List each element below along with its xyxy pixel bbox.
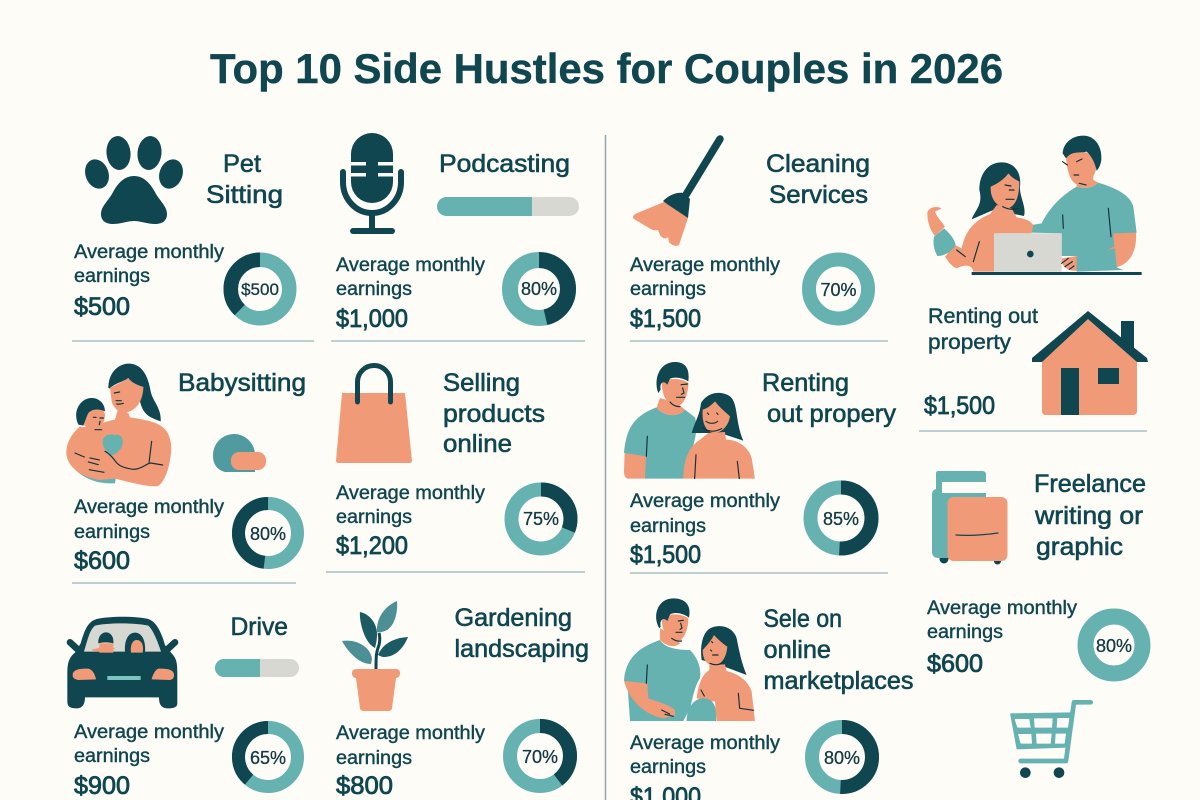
heading	[1034, 470, 1146, 561]
panel: pet sitting	[74, 135, 301, 330]
heading: out propery	[767, 400, 897, 428]
panel: babysitting	[66, 364, 306, 575]
donut chart: 75%	[523, 509, 559, 529]
heading: Drive	[230, 613, 288, 641]
icon: car	[67, 617, 177, 708]
earnings text: $1,200	[336, 532, 408, 560]
illustration: couple	[624, 598, 755, 721]
earnings text: earnings	[74, 266, 150, 287]
donut chart	[512, 490, 570, 548]
earnings text: $1,500	[630, 305, 701, 333]
donut chart: 85%	[823, 509, 859, 529]
donut chart: $500	[241, 280, 279, 299]
panel: gardening landscaping	[336, 601, 589, 800]
earnings text: Average monthly	[74, 722, 225, 743]
heading: Freelance	[1034, 470, 1146, 498]
illustration: couple	[624, 362, 755, 479]
center vertical divider	[604, 135, 606, 800]
donut chart	[226, 715, 310, 799]
title: Top 10 Side Hustles for Couples in 2026	[210, 45, 1003, 92]
earnings text: earnings	[927, 622, 1003, 643]
icon: shopping cart	[1010, 702, 1091, 778]
heading: Sele on	[764, 605, 842, 633]
heading: graphic	[1036, 533, 1123, 561]
heading	[206, 150, 283, 209]
earnings text: $1,000	[336, 305, 408, 333]
earnings text: $500	[74, 293, 130, 321]
earnings text: earnings	[630, 516, 706, 537]
earnings text	[630, 255, 781, 333]
donut chart	[1086, 616, 1142, 674]
donut chart: 80%	[824, 748, 860, 768]
heading: online	[443, 430, 512, 458]
donut chart	[810, 488, 872, 548]
heading: Services	[769, 181, 868, 209]
earnings text: Average monthly	[630, 491, 781, 512]
icon: house	[1032, 311, 1148, 415]
heading: Selling	[443, 369, 520, 397]
heading: products	[443, 400, 545, 428]
small heading: Renting out	[928, 305, 1038, 328]
earnings text: Average monthly	[927, 598, 1078, 619]
donut chart: 70%	[522, 747, 558, 767]
earnings text: Average monthly	[336, 255, 486, 276]
heading	[454, 604, 589, 663]
earnings text: earnings	[336, 507, 412, 528]
donut chart	[510, 260, 568, 318]
panel: cleaning services	[630, 139, 870, 333]
donut chart: 70%	[820, 280, 857, 300]
small heading	[928, 305, 1038, 354]
earnings text: Average monthly	[630, 733, 781, 754]
donut chart: 65%	[250, 748, 286, 768]
earnings text	[74, 722, 225, 800]
earnings text	[336, 255, 486, 333]
icon: microphone	[343, 133, 401, 231]
heading: writing or	[1034, 502, 1143, 530]
heading	[443, 369, 545, 458]
earnings text: Average monthly	[336, 483, 486, 504]
heading: Renting	[762, 369, 849, 397]
earnings text: $800	[336, 772, 393, 800]
donut chart	[510, 726, 570, 786]
earnings text	[630, 733, 781, 800]
earnings text: earnings	[336, 748, 412, 769]
icon: paw	[81, 135, 187, 224]
earnings text: $600	[927, 650, 983, 678]
donut chart	[219, 248, 301, 330]
earnings text: Average monthly	[630, 255, 781, 276]
donut chart	[812, 727, 872, 787]
donut chart	[809, 260, 868, 318]
heading	[762, 369, 897, 428]
progress bar	[215, 659, 299, 677]
donut chart: 80%	[521, 279, 557, 299]
illustration: couple at laptop	[927, 136, 1142, 275]
heading: Podcasting	[439, 150, 570, 178]
donut chart	[235, 500, 301, 566]
earnings text: earnings	[74, 522, 150, 543]
earnings text: Average monthly	[336, 723, 486, 744]
earnings text: $900	[74, 772, 130, 800]
earnings text: earnings	[630, 279, 706, 300]
earnings text: earnings	[630, 757, 706, 778]
earnings text	[927, 598, 1078, 678]
panel: podcasting	[336, 133, 579, 333]
small heading: property	[928, 331, 1012, 354]
heading: online	[764, 636, 831, 664]
earnings text	[630, 491, 781, 569]
heading	[764, 605, 914, 695]
donut chart: 80%	[250, 524, 286, 544]
earnings text: $600	[74, 547, 130, 575]
icon: broom	[633, 139, 720, 246]
earnings text: $1,500	[630, 541, 701, 569]
heading: Gardening	[454, 604, 572, 632]
panel: selling products online	[336, 366, 570, 560]
earnings text	[336, 723, 486, 800]
icon: small decoration	[213, 434, 266, 472]
panel: sele on online marketplaces	[624, 598, 914, 800]
heading: Pet	[223, 150, 261, 178]
icon: shopping bag	[336, 366, 412, 463]
icon: parent and baby	[66, 364, 171, 486]
earnings text: earnings	[74, 746, 150, 767]
earnings text: Average monthly	[74, 497, 225, 518]
heading: marketplaces	[764, 667, 914, 695]
heading: landscaping	[454, 635, 589, 663]
earnings text: earnings	[336, 279, 412, 300]
panel: renting out propery	[624, 362, 897, 569]
earnings text	[74, 242, 225, 321]
earnings text: Average monthly	[74, 242, 225, 263]
panel: drive	[67, 613, 310, 800]
earnings text	[74, 497, 225, 575]
panel: freelance writing or graphic	[927, 470, 1146, 678]
heading: Cleaning	[766, 150, 870, 178]
earnings text	[336, 483, 486, 560]
icon: potted plant	[342, 601, 408, 711]
earnings amount: $1,500	[924, 392, 995, 420]
heading	[766, 150, 870, 209]
progress bar	[437, 197, 579, 216]
donut chart: 80%	[1096, 636, 1132, 656]
heading: Sitting	[206, 181, 283, 209]
icon: suitcase	[932, 471, 1008, 564]
heading: Babysitting	[178, 369, 306, 397]
panel: couple with laptop and renting out property	[924, 136, 1148, 420]
